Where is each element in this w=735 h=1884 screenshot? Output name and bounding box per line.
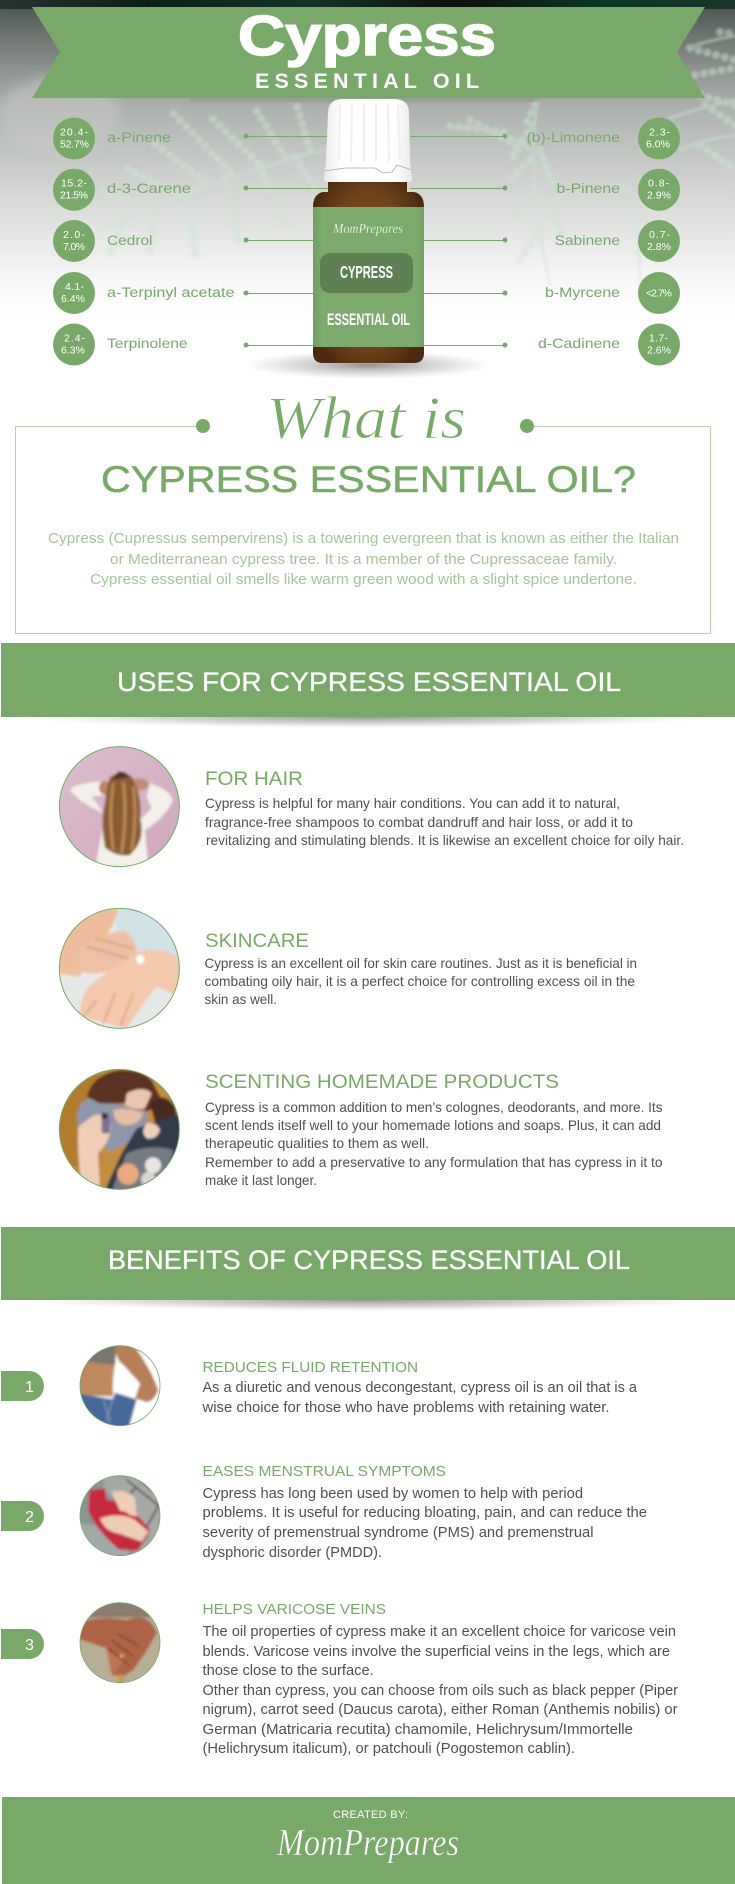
text: for hair <box>205 795 684 848</box>
left compounds list: 6.3% <box>61 344 85 356</box>
text: Cypress has long been used by women to help with period <box>202 1485 583 1502</box>
heading: Cypress Essential Oil?: CYPRESS ESSENTIAL OIL? <box>101 459 636 500</box>
benefit 3: helps varicose veins <box>1 1599 678 1757</box>
essential oil bottle <box>246 99 490 379</box>
text: for hair: fragrance-free shampoos to combat dandruff and hair loss, or add it to <box>205 814 633 830</box>
left compounds list: a-Terpinyl acetate <box>107 284 235 300</box>
text: The oil properties of cypress make it an excellent choice for varicose vein <box>202 1623 676 1640</box>
left compounds list: d-3-Carene <box>107 180 191 196</box>
left compounds list: 15.2- <box>61 178 88 190</box>
text: (Helichrysum italicum), or patchouli (Pogostemon cablin). <box>202 1740 575 1757</box>
bottle label: CYPRESS <box>340 262 393 282</box>
right compounds list: 0.7- <box>649 229 670 241</box>
right compounds list: (b)-Limonene <box>526 129 620 145</box>
right compounds list: 2.9% <box>647 190 671 202</box>
left compounds list: 21.5% <box>60 190 88 202</box>
title: Cypress: Cypress <box>238 4 496 68</box>
left compounds list <box>53 118 235 366</box>
text <box>202 1623 678 1757</box>
heading: scenting homemade products: SCENTING HOMEMADE PRODUCTS <box>205 1072 559 1093</box>
right compounds list: 0.8- <box>648 178 670 190</box>
section banner: benefits: BENEFITS OF CYPRESS ESSENTIAL OIL <box>108 1245 630 1275</box>
left compounds list: 2.0- <box>63 229 86 241</box>
text: scenting homemade products: scent lends itself well to your homemade lotions and soaps. Plus, it can add <box>205 1117 661 1133</box>
heading: skincare: SKINCARE <box>205 931 309 952</box>
created by label: CREATED BY: <box>333 1809 408 1821</box>
text: those close to the surface. <box>202 1662 374 1679</box>
heading: for hair: FOR HAIR <box>205 769 303 790</box>
text: scenting homemade products: Remember to add a preservative to any formulation that has cypress in it to <box>205 1154 663 1170</box>
number tab 1 <box>1 1371 44 1401</box>
title banner <box>32 4 705 102</box>
bottle label: ESSENTIAL OIL <box>327 310 410 329</box>
benefit 2: eases menstrual symptoms <box>1 1463 647 1561</box>
description text: or Mediterranean cypress tree. It is a member of the Cupressaceae family. <box>110 551 617 568</box>
right compounds list: 2.8% <box>647 241 671 253</box>
left compounds list: 2.4- <box>64 332 86 344</box>
text: nigrum), carrot seed (Daucus carota), either Roman (Anthemis nobilis) or <box>202 1701 678 1718</box>
number tab 2: 2 <box>25 1509 34 1526</box>
text: skincare: skin as well. <box>204 991 277 1007</box>
number tab 3 <box>1 1629 44 1659</box>
photo: hot water bottle <box>80 1475 160 1556</box>
left compounds list: 6.4% <box>61 293 85 305</box>
text: skincare: combating oily hair, it is a perfect choice for controlling excess oil in the <box>204 973 635 989</box>
header background with cypress foliage <box>0 0 735 345</box>
right compounds list: 2.3- <box>649 126 670 138</box>
photo: loose jeans waist <box>80 1345 160 1426</box>
photo: older hands on cane <box>80 1602 160 1684</box>
right compounds list: Sabinene <box>555 232 620 248</box>
heading: What is: What is <box>266 385 466 451</box>
text: problems. It is useful for reducing bloating, pain, and can reduce the <box>202 1504 647 1521</box>
left compounds list: 52.7% <box>60 138 89 150</box>
number tab 3: 3 <box>25 1637 34 1654</box>
left compounds list: a-Pinene <box>107 129 171 145</box>
photo: woman with long hair <box>57 743 183 870</box>
use: for hair <box>57 743 684 870</box>
panel: what is cypress essential oil <box>16 385 710 634</box>
text: As a diuretic and venous decongestant, cypress oil is an oil that is a <box>202 1379 638 1396</box>
number tab 1: 1 <box>25 1379 34 1396</box>
right compounds list <box>526 118 680 366</box>
left compounds list: Cedrol <box>107 232 152 248</box>
heading: REDUCES FLUID RETENTION <box>202 1359 418 1376</box>
text: blends. Varicose veins involve the superficial veins in the legs, which are <box>202 1643 670 1660</box>
text: scenting homemade products <box>205 1099 663 1188</box>
photo: hands applying cream <box>57 907 183 1033</box>
text: severity of premenstrual syndrome (PMS) and premenstrual <box>202 1524 594 1541</box>
right compounds list: b-Pinene <box>556 180 620 196</box>
text: scenting homemade products: therapeutic qualities to them as well. <box>205 1135 429 1151</box>
heading: EASES MENSTRUAL SYMPTOMS <box>202 1463 446 1480</box>
right compounds list: 2.6% <box>647 344 671 356</box>
text: for hair: revitalizing and stimulating blends. It is likewise an excellent choice for oily hair. <box>206 832 684 848</box>
connector lines from compounds to bottle <box>244 134 508 348</box>
number tab 2 <box>1 1501 44 1531</box>
text: dysphoric disorder (PMDD). <box>202 1544 382 1561</box>
text: scenting homemade products: Cypress is a common addition to men’s colognes, deodorants, and more. Its <box>205 1099 662 1115</box>
text <box>202 1485 647 1561</box>
description text: Cypress essential oil smells like warm green wood with a slight spice undertone. <box>90 571 637 588</box>
left compounds list: Terpinolene <box>107 335 188 351</box>
right compounds list: 1.7- <box>649 332 668 344</box>
section banner: benefits <box>1 1227 735 1311</box>
description text <box>48 530 679 588</box>
right compounds list: d-Cadinene <box>538 335 620 351</box>
text <box>202 1379 638 1416</box>
footer <box>2 1797 735 1884</box>
bottle label <box>313 207 424 347</box>
photo: woman applying perfume <box>57 1067 183 1193</box>
text: scenting homemade products: make it last longer. <box>205 1172 317 1188</box>
brand name: MomPrepares <box>276 1822 459 1864</box>
use: skincare <box>57 907 637 1033</box>
right compounds list: 6.0% <box>646 138 670 150</box>
text: wise choice for those who have problems with retaining water. <box>202 1399 610 1416</box>
section banner: uses <box>1 643 735 728</box>
text: German (Matricaria recutita) chamomile, Helichrysum/Immortelle <box>202 1721 633 1738</box>
right compounds list: b-Myrcene <box>545 284 620 300</box>
subtitle: Essential Oil: ESSENTIAL OIL <box>255 69 479 93</box>
text: Other than cypress, you can choose from oils such as black pepper (Piper <box>202 1682 678 1699</box>
bottle cap <box>324 99 412 182</box>
use: scenting homemade products <box>57 1067 663 1193</box>
left compounds list: 4.1- <box>65 281 84 293</box>
left compounds list: 20.4- <box>60 126 88 138</box>
heading: HELPS VARICOSE VEINS <box>202 1601 386 1618</box>
right compounds list: <2.7% <box>646 288 672 300</box>
text: skincare: Cypress is an excellent oil for skin care routines. Just as it is beneficial in <box>204 955 637 971</box>
benefit 1: reduces fluid retention <box>1 1342 638 1430</box>
text: for hair: Cypress is helpful for many hair conditions. You can add it to natural, <box>205 795 620 811</box>
section banner: uses: USES FOR CYPRESS ESSENTIAL OIL <box>117 667 621 697</box>
description text: Cypress (Cupressus sempervirens) is a towering evergreen that is known as either the Italian <box>48 530 679 547</box>
text: skincare <box>204 955 637 1007</box>
bottle label: MomPrepares <box>332 222 403 237</box>
left compounds list: 7.0% <box>63 241 85 253</box>
